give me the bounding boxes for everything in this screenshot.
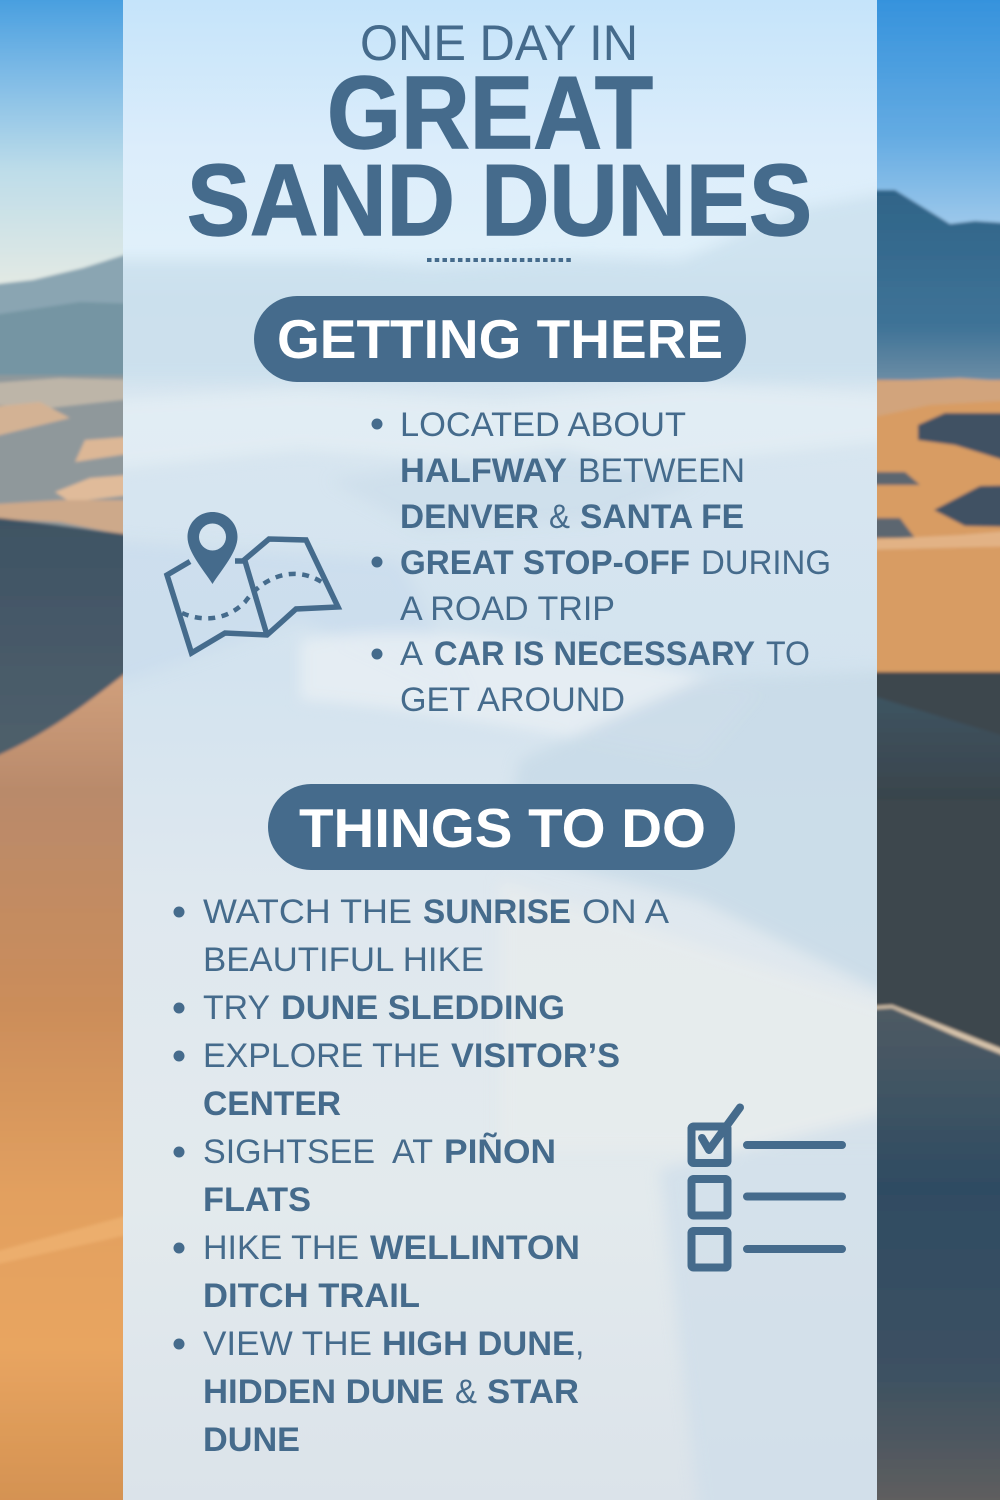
bullet: sunrise: SUNRISE: [423, 893, 571, 931]
heading: things to do: [268, 784, 735, 870]
bullet: car: CAR IS NECESSARY: [434, 635, 755, 673]
bullet: visitor center: [174, 1037, 620, 1123]
bullet: road trip: [372, 544, 831, 628]
bullet: dunes: DUNE: [203, 1421, 300, 1459]
bullet: sunrise: [174, 893, 669, 979]
heading: getting there: GETTING THERE: [277, 308, 723, 370]
bullet: wellinton ditch: HIKE THE: [203, 1229, 359, 1267]
bullet: wellinton ditch: DITCH TRAIL: [203, 1277, 420, 1315]
bullet: dunes: HIDDEN DUNE: [203, 1373, 444, 1411]
bullet: car: GET AROUND: [400, 681, 625, 719]
bullet: visitor center: EXPLORE THE: [203, 1037, 440, 1075]
bullet: visitor center: VISITOR’S: [451, 1037, 620, 1075]
icon: checklist: [692, 1108, 842, 1268]
bullet: visitor center: CENTER: [203, 1085, 341, 1123]
bullet: car: TO: [766, 635, 810, 673]
bullet: road trip: DURING: [701, 544, 831, 582]
icon: map with location pin: [167, 512, 338, 653]
bullet: location: [372, 406, 745, 536]
bullet: sunrise: WATCH THE: [203, 893, 412, 931]
list: getting there: [372, 406, 831, 719]
bullet: pinon flats: FLATS: [203, 1181, 311, 1219]
panel: translucent content column: [100, 0, 900, 1500]
bullet: dunes: ,: [575, 1325, 584, 1363]
title line: sand dunes: SAND DUNES: [187, 145, 812, 257]
bullet: dunes: [174, 1325, 584, 1459]
bullet: location: SANTA FE: [580, 498, 744, 536]
bullet: sledding: TRY: [203, 989, 270, 1027]
heading: things to do: THINGS TO DO: [299, 797, 706, 859]
bullet: dunes: HIGH DUNE: [382, 1325, 575, 1363]
bullet: location: BETWEEN: [578, 452, 745, 490]
bullet: wellinton ditch: [174, 1229, 580, 1315]
dotted divider: [427, 258, 574, 262]
bullet: dunes: STAR: [487, 1373, 579, 1411]
bullet: pinon flats: SIGHTSEE AT: [203, 1133, 433, 1171]
bullet: dunes: &: [455, 1373, 477, 1411]
bullet: location: HALFWAY: [400, 452, 567, 490]
bullet: dunes: VIEW THE: [203, 1325, 372, 1363]
bullet: location: LOCATED ABOUT: [400, 406, 686, 444]
list: things to do: [174, 893, 669, 1459]
bullet: sledding: DUNE SLEDDING: [281, 989, 565, 1027]
title line: one day in: ONE DAY IN: [360, 15, 638, 71]
bullet: pinon flats: [174, 1133, 556, 1219]
bullet: pinon flats: PIÑON: [444, 1133, 556, 1171]
bullet: road trip: GREAT STOP-OFF: [400, 544, 690, 582]
bullet: location: DENVER: [400, 498, 539, 536]
title: [187, 15, 812, 257]
bullet: car: [372, 635, 810, 719]
bullet: sunrise: BEAUTIFUL HIKE: [203, 941, 484, 979]
bullet: car: A: [400, 635, 423, 673]
bullet: wellinton ditch: WELLINTON: [370, 1229, 580, 1267]
bullet: sunrise: ON A: [582, 893, 669, 931]
bullet: location: &: [549, 498, 570, 536]
title line: great: GREAT: [327, 55, 653, 170]
heading: getting there: [254, 296, 746, 382]
bullet: road trip: A ROAD TRIP: [400, 590, 615, 628]
